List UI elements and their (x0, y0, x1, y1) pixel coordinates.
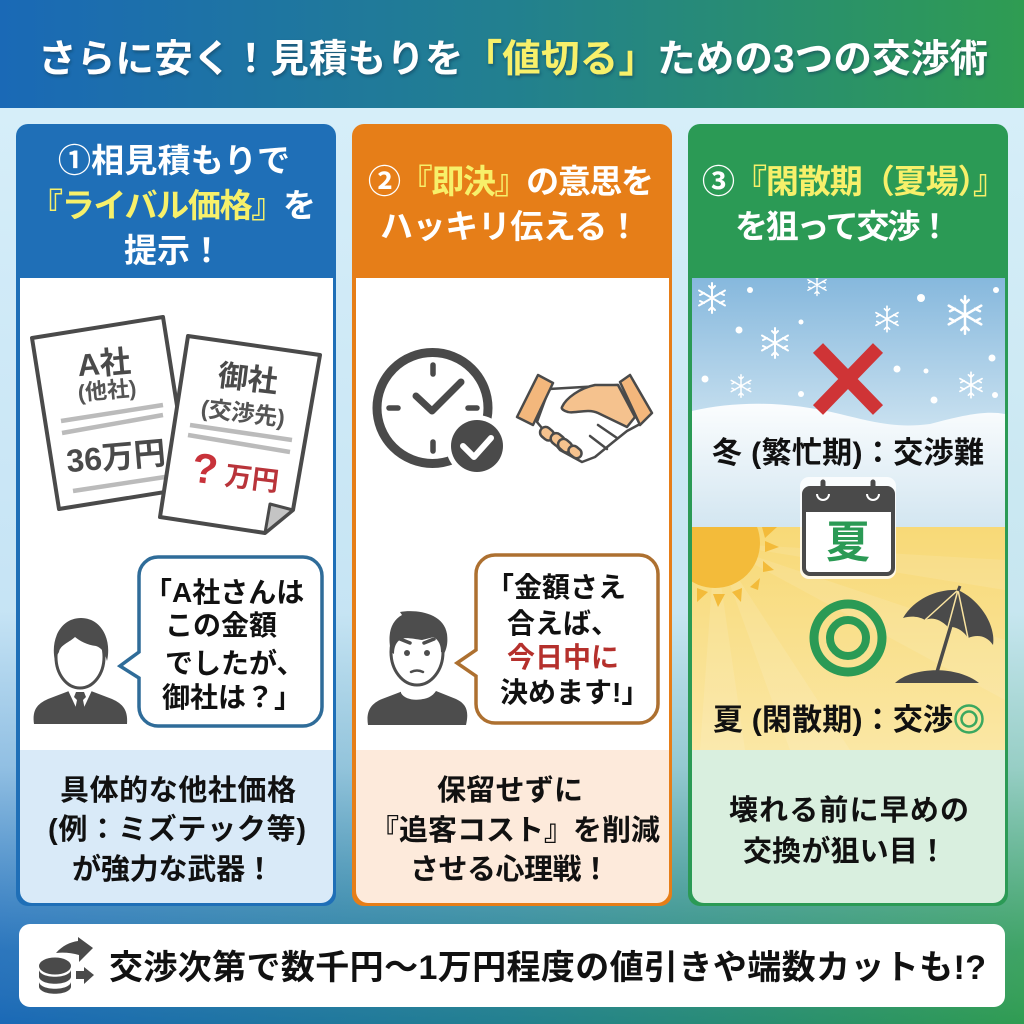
sun rays (700, 543, 1005, 750)
person: businessman (34, 618, 127, 724)
document: 御社 (160, 336, 320, 533)
double circle (814, 604, 882, 672)
speech bubble 1 (120, 557, 322, 726)
speech bubble 1: 御社は？」 (162, 682, 302, 713)
icon: coins and arrows (39, 937, 94, 994)
panel 2 caption: させる心理戦！ (410, 853, 610, 886)
panel 2 heading: ②『即決』の意思を (368, 163, 654, 200)
panel: 即決 (352, 124, 672, 906)
snow hill (692, 404, 1005, 527)
snowflakes (699, 274, 999, 404)
panel 1 heading (30, 142, 316, 269)
winter label: 冬 (繁忙期)：交渉難 (712, 437, 984, 470)
summer label: 夏 (閑散期)：交渉 (713, 704, 953, 737)
panel 3 caption: 交換が狙い目！ (743, 834, 947, 868)
panel 2 caption: 保留せずに (437, 774, 583, 807)
panel 3 heading: を狙って交渉！ (735, 208, 951, 245)
panel 1 heading: 提示！ (124, 232, 223, 269)
panel 2 heading: ハッキリ伝える！ (380, 208, 640, 245)
panel 1 caption: (例：ミズテック等) (48, 812, 306, 846)
panel 2 heading (368, 163, 654, 245)
panel 1 caption (48, 774, 306, 886)
panel 1 caption: が強力な武器！ (72, 852, 274, 886)
icon: calendar (800, 477, 896, 579)
panel 1 caption: 具体的な他社価格 (60, 774, 296, 807)
panel: 相見積もり (16, 124, 336, 906)
speech bubble 1: この金額 (165, 610, 277, 641)
icon: clock with check (377, 352, 508, 477)
panel 2 caption (370, 774, 660, 886)
document: 御社: (交渉先) (200, 395, 286, 431)
speech bubble 2 (457, 555, 658, 723)
icon: handshake (517, 375, 652, 462)
winter sky (692, 278, 1005, 428)
speech bubble 2: 「金額さえ (486, 572, 626, 603)
icon: calendar: 夏 (826, 518, 870, 567)
document: 御社: ? (189, 444, 221, 493)
icon: beach umbrella (895, 586, 993, 683)
red cross (818, 348, 878, 410)
document: A社 (32, 317, 190, 509)
document: A社: A社 (76, 344, 132, 383)
footer bar (19, 924, 1005, 1007)
panel 1 heading: ①相見積もりで (58, 142, 290, 179)
title banner (0, 0, 1024, 108)
speech bubble 2: 今日中に (507, 642, 619, 673)
document: A社: (他社) (77, 375, 137, 406)
panel: 閑散期 (670, 124, 1008, 906)
speech bubble 2: 決めます!」 (500, 677, 649, 708)
title: さらに安く！見積もりを「値切る」ための3つの交渉術 (38, 38, 988, 81)
panel 3 caption: 壊れる前に早めの (729, 794, 969, 827)
panel 3 caption (729, 794, 969, 868)
document: 御社: 御社 (216, 359, 280, 400)
season scene (670, 274, 1005, 750)
panel 3 heading (702, 163, 1006, 245)
speech bubble 2: 合えば、 (507, 608, 619, 639)
footer text: 交渉次第で数千円～1万円程度の値引きや端数カットも!? (109, 949, 986, 987)
person: customer (368, 611, 467, 725)
document: A社: 36万円 (65, 435, 167, 479)
panel 3 heading: ③『閑散期（夏場）』 (702, 163, 1006, 200)
icon: sun (692, 527, 779, 607)
summer sand (692, 527, 1005, 750)
speech bubble 1: でしたが、 (165, 647, 304, 679)
green double circle glyph (956, 706, 982, 732)
panel 2 caption: 『追客コスト』を削減 (370, 814, 660, 847)
speech bubble 1: 「A社さんは (144, 577, 304, 608)
document: 御社: 万円 (223, 461, 281, 497)
panel 1 heading: 『ライバル価格』を (30, 187, 316, 224)
